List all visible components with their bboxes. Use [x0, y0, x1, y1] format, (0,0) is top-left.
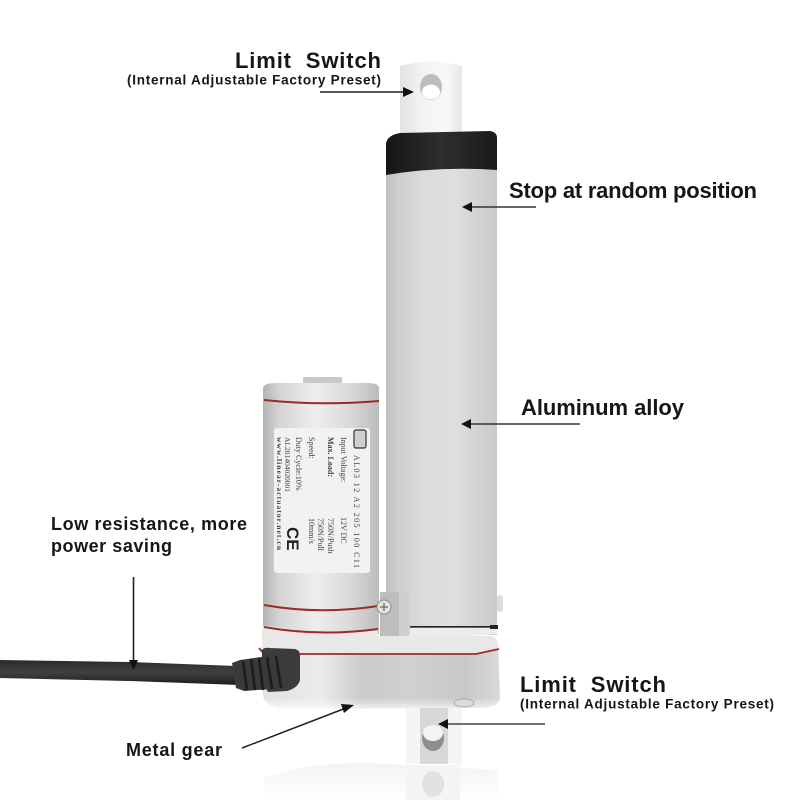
- callout: low resistance: Low resistance, more: [51, 514, 247, 534]
- motor specification label: 750N/Push: [326, 518, 335, 554]
- motor specification label: AL03 12 A2 205 100 C11: [352, 455, 361, 568]
- motor specification label: 12V DC: [339, 517, 348, 544]
- motor specification label: 750N/Pull: [316, 518, 325, 552]
- motor specification label: Duty Cycle:10%: [294, 437, 303, 491]
- top rod with mounting hole: [400, 62, 462, 134]
- arrow: top limit switch: [320, 87, 414, 97]
- mounting bracket and screw: [377, 592, 409, 636]
- power cable and connector: [0, 648, 300, 692]
- motor specification label: Max. Load:: [326, 437, 335, 477]
- tube side screw: [497, 595, 503, 612]
- motor housing: [263, 377, 379, 634]
- motor specification label: [274, 428, 370, 573]
- tube lower ring and slit: [410, 625, 498, 637]
- callout: low resistance: power saving: [51, 536, 172, 556]
- arrow: metal gear: [242, 704, 354, 748]
- main aluminium tube: [386, 165, 497, 635]
- lower rod with mounting hole: [406, 699, 474, 764]
- motor specification label: CE: [283, 527, 302, 551]
- callout: top limit switch: [127, 48, 381, 88]
- callout: bottom limit switch: Limit Switch: [520, 672, 666, 697]
- motor specification label: www.linear-actuator.net.cn: [275, 437, 284, 551]
- callout: bottom limit switch: [520, 672, 774, 712]
- floor reflection: [263, 763, 498, 800]
- motor specification label: Input Voltage:: [339, 437, 348, 482]
- actuator product illustration: [0, 62, 503, 800]
- callout: top limit switch: Limit Switch: [235, 48, 381, 73]
- motor specification label: AL201404020001: [283, 437, 292, 492]
- arrow: low resistance cable: [129, 577, 138, 670]
- callout: stop at random position: Stop at random position: [509, 178, 757, 203]
- motor specification label: 10mm/s: [307, 518, 316, 544]
- callout: aluminum alloy: Aluminum alloy: [521, 395, 685, 420]
- callout: low resistance: [51, 514, 247, 556]
- arrow: bottom limit switch: [438, 719, 545, 729]
- motor specification label: Speed:: [307, 437, 316, 459]
- arrow: stop at random position: [462, 202, 536, 212]
- callout: top limit switch: (Internal Adjustable Factory Preset): [127, 72, 381, 88]
- arrow: aluminum alloy: [461, 419, 580, 429]
- callout: metal gear: Metal gear: [126, 740, 222, 760]
- black collar: [386, 131, 497, 175]
- gearbox base: [259, 626, 500, 709]
- callout: bottom limit switch: (Internal Adjustable Factory Preset): [520, 696, 774, 712]
